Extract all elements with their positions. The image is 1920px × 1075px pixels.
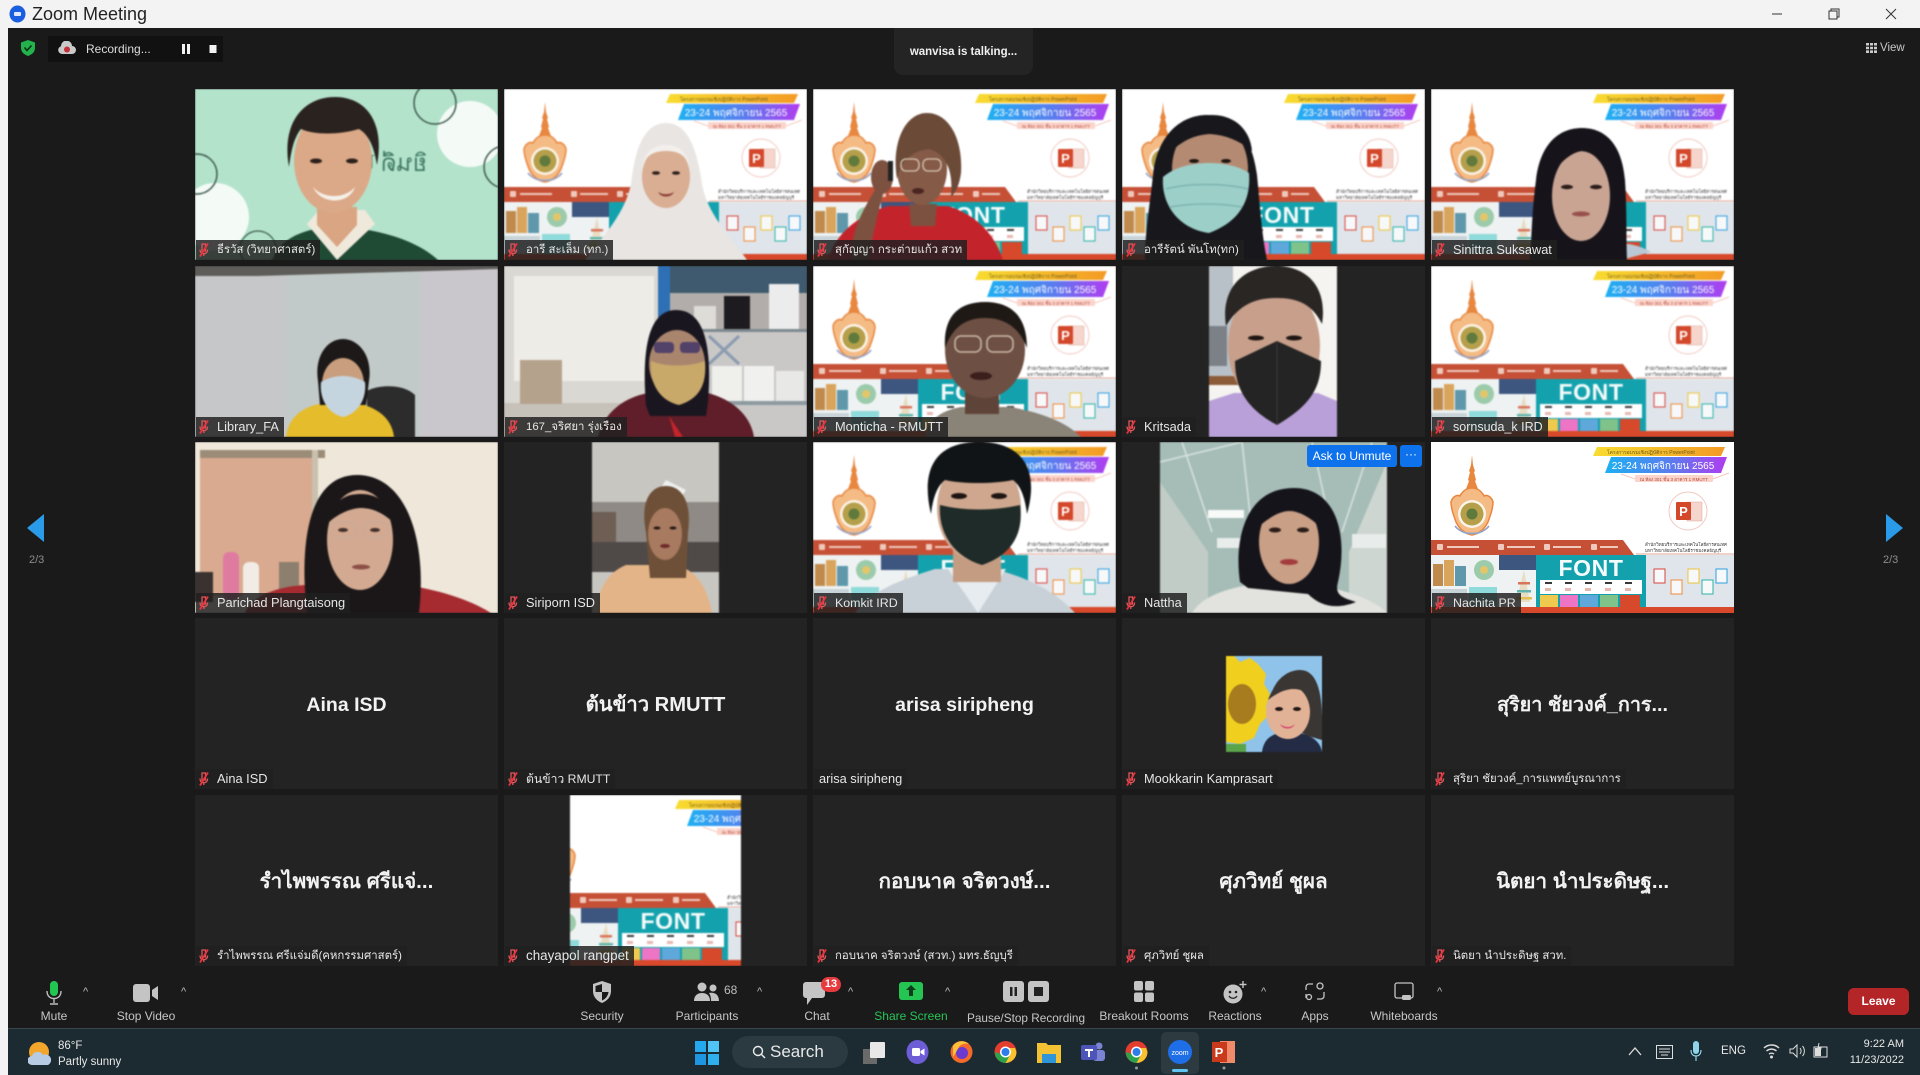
toolbar button: participants: Participants xyxy=(676,1009,738,1023)
tile: Nattha with ask to unmute xyxy=(1122,442,1425,613)
tile: Kritsada: Kritsada xyxy=(1144,419,1191,434)
toolbar button: chat: Chat xyxy=(804,1009,830,1023)
tile: Parichad Plangtaisong: Parichad Plangtaisong xyxy=(217,595,345,610)
tile: woman in red shirt on phone: สุกัญญา กระต่ายแก้ว สวท xyxy=(835,244,962,256)
icon: powerpoint xyxy=(1212,1041,1235,1070)
tile: Siriporn ISD: Siriporn ISD xyxy=(526,595,595,610)
icon: zoom logo xyxy=(10,6,26,22)
more options button xyxy=(1400,445,1422,467)
search box xyxy=(732,1036,848,1068)
tile: woman in tan mask with shelves xyxy=(504,266,807,437)
tile: Nattha with ask to unmute: Nattha xyxy=(1144,595,1182,610)
active speaker tooltip xyxy=(894,28,1033,75)
tile: arisa siripheng: arisa siripheng xyxy=(895,694,1034,716)
clock: 11/23/2022 xyxy=(1850,1054,1904,1066)
toolbar button: mute: Mute xyxy=(41,1009,67,1023)
tile: กอบนาค จริตวงษ์: กอบนาค จริตวงษ์... xyxy=(879,870,1050,893)
clock: 9:22 AM xyxy=(1864,1038,1904,1050)
tile: รำไพพรรณ ศรีแจ่มดี: รำไพพรรณ ศรีแจ่มดี(คหกรรมศาสตร์) xyxy=(217,950,402,962)
tile: arisa siripheng xyxy=(813,618,1116,789)
previous page arrow: 2/3 xyxy=(29,554,44,566)
tile: Mookkarin Kamprasart xyxy=(1122,618,1425,789)
toolbar button: security: Security xyxy=(580,1009,624,1023)
chat badge 13: 13 xyxy=(825,978,837,990)
tile: teacher with green background: ยินดี UTT xyxy=(328,150,427,177)
icon: zoom active xyxy=(1161,1032,1199,1074)
toolbar button: share screen xyxy=(874,982,950,1023)
toolbar button: stop video: Stop Video xyxy=(117,1009,175,1023)
more options button: ··· xyxy=(1405,447,1417,461)
icon: encryption shield xyxy=(21,40,35,56)
icon: powerpoint: P xyxy=(1215,1045,1224,1060)
chat badge 13 xyxy=(821,977,841,992)
tile: Sinittra Suksawat xyxy=(1431,89,1734,260)
toolbar button: chat xyxy=(803,977,853,1023)
leave button xyxy=(1848,988,1909,1015)
toolbar button: stop video xyxy=(117,984,186,1023)
view button xyxy=(1866,42,1905,54)
tile: woman in teal mask: อารีรัตน์ พันโท(ทก) xyxy=(1144,244,1239,256)
tile: กอบนาค จริตวงษ์: กอบนาค จริตวงษ์ (สวท.) มทร.ธัญบุรี xyxy=(835,950,1013,962)
left window edge xyxy=(0,28,8,1075)
system tray icons xyxy=(1628,1041,1828,1061)
weather widget xyxy=(28,1040,122,1068)
icon: chrome running xyxy=(1126,1041,1148,1070)
tile: สุริยา ชัยวงค์: สุริยา ชัยวงค์_การ... xyxy=(1497,694,1668,716)
text: ^ xyxy=(848,986,853,998)
text: ^ xyxy=(83,986,88,998)
clock xyxy=(1850,1038,1904,1066)
tile: Aina ISD: Aina ISD xyxy=(306,694,387,716)
icon: chrome xyxy=(994,1041,1016,1063)
tile: ศุภวิทย์ ชูผล: ศุภวิทย์ ชูผล xyxy=(1144,950,1204,962)
icon: file explorer xyxy=(1037,1043,1061,1063)
participant grid xyxy=(195,89,1734,966)
tile: Monticha - RMUTT xyxy=(813,266,1116,437)
avatar: woman with sunflower xyxy=(1225,655,1323,753)
text: ^ xyxy=(1261,986,1266,998)
tile: รำไพพรรณ ศรีแจ่มดี: รำไพพรรณ ศรีแจ่... xyxy=(260,870,433,893)
toolbar button: participants: 68 xyxy=(724,983,737,997)
active speaker tooltip: wanvisa is talking... xyxy=(910,46,1017,58)
tile: woman in red shirt on phone xyxy=(813,89,1116,260)
toolbar button: apps: Apps xyxy=(1301,1009,1329,1023)
tile: นิตยา นำประดิษฐ: นิตยา นำประดิษฐ สวท. xyxy=(1453,950,1566,962)
tile: สุริยา ชัยวงค์ xyxy=(1431,618,1734,789)
tile: sornsuda_k IRD slide only xyxy=(1431,266,1734,437)
icon: meet chat xyxy=(906,1040,928,1064)
toolbar button: whiteboards xyxy=(1370,982,1442,1023)
tile: Nachita PR slide only: Nachita PR xyxy=(1453,596,1516,610)
windows taskbar xyxy=(8,1028,1920,1075)
toolbar button: breakout rooms xyxy=(1099,981,1189,1023)
tile: ต้นข้าว RMUTT xyxy=(504,618,807,789)
tile: Parichad Plangtaisong xyxy=(195,442,498,613)
tile: teacher with green background xyxy=(195,89,498,260)
toolbar button: reactions xyxy=(1208,981,1266,1023)
toolbar button: share screen: Share Screen xyxy=(874,1009,948,1023)
tile: Kritsada xyxy=(1122,266,1425,437)
icon: task view xyxy=(863,1042,885,1064)
tile: arisa siripheng: arisa siripheng xyxy=(819,771,902,786)
leave button: Leave xyxy=(1861,994,1896,1008)
window controls xyxy=(1772,8,1896,20)
tile: Sinittra Suksawat: Sinittra Suksawat xyxy=(1453,242,1552,257)
icon: teams xyxy=(1081,1042,1105,1061)
tile: Nachita PR slide only xyxy=(1431,442,1734,613)
weather text: Partly sunny xyxy=(58,1056,121,1068)
text: ^ xyxy=(1437,986,1442,998)
icon: pause and stop xyxy=(182,44,216,54)
tile: ต้นข้าว RMUTT: ต้นข้าว RMUTT xyxy=(586,694,725,716)
tile: ศุภวิทย์ ชูผล xyxy=(1122,795,1425,966)
tile: woman in white hijab xyxy=(504,89,807,260)
ask to unmute button: Ask to Unmute xyxy=(1313,449,1391,463)
recording label: Recording... xyxy=(86,42,151,56)
toolbar button: security xyxy=(580,981,624,1023)
tile: teacher with green background: ธีรวัส (วิทยาศาสตร์) xyxy=(217,244,315,256)
tile: Komkit IRD: Komkit IRD xyxy=(835,596,898,610)
tile: นิตยา นำประดิษฐ xyxy=(1431,795,1734,966)
tile: Aina ISD: Aina ISD xyxy=(217,771,268,786)
next page arrow: 2/3 xyxy=(1883,554,1898,566)
icon: recording cloud xyxy=(58,41,76,54)
tile: Library_FA: Library_FA xyxy=(217,419,279,434)
ask to unmute button xyxy=(1307,445,1397,467)
tile: sornsuda_k IRD slide only: sornsuda_k IRD xyxy=(1453,420,1543,434)
tile: woman in white hijab: อารี สะเล็ม (ทก.) xyxy=(526,244,608,256)
tile: Mookkarin Kamprasart: Mookkarin Kamprasart xyxy=(1144,771,1273,786)
tile: Library_FA xyxy=(195,266,498,437)
tile: Siriporn ISD xyxy=(504,442,807,613)
tile: รำไพพรรณ ศรีแจ่มดี xyxy=(195,795,498,966)
weather text: 86°F xyxy=(58,1040,82,1052)
next page arrow xyxy=(1883,514,1903,566)
toolbar button: whiteboards: Whiteboards xyxy=(1370,1009,1438,1023)
text: ^ xyxy=(757,986,762,998)
tile: Aina ISD xyxy=(195,618,498,789)
text: ^ xyxy=(181,986,186,998)
icon: zoom active: zoom xyxy=(1171,1050,1189,1057)
toolbar button: reactions: Reactions xyxy=(1208,1009,1262,1023)
window title: Zoom Meeting xyxy=(32,4,147,24)
toolbar button: breakout rooms: Breakout Rooms xyxy=(1099,1009,1189,1023)
tile: woman in tan mask with shelves: 167_จริศยา รุ่งเรือง xyxy=(526,421,622,433)
tile: นิตยา นำประดิษฐ: นิตยา นำประดิษฐ... xyxy=(1496,870,1669,893)
language indicator: ENG xyxy=(1721,1045,1746,1057)
weather text xyxy=(58,1040,122,1068)
tile: chayapol rangpet with cropped slide: chayapol rangpet xyxy=(526,948,629,963)
view button: View xyxy=(1880,42,1905,54)
tile: สุริยา ชัยวงค์: สุริยา ชัยวงค์_การแพทย์บูรณาการ xyxy=(1453,773,1621,785)
title bar xyxy=(0,0,1920,28)
icon: windows start xyxy=(695,1041,719,1065)
toolbar button: participants xyxy=(676,982,762,1023)
tile: Monticha - RMUTT: Monticha - RMUTT xyxy=(835,419,943,434)
toolbar button: mute xyxy=(41,981,88,1023)
tile: กอบนาค จริตวงษ์ xyxy=(813,795,1116,966)
previous page arrow xyxy=(27,514,44,566)
tile: chayapol rangpet with cropped slide xyxy=(504,795,807,966)
text: ^ xyxy=(945,986,950,998)
toolbar button: pause or stop recording: Pause/Stop Recording xyxy=(967,1011,1085,1025)
icon: sun behind cloud xyxy=(28,1042,52,1065)
toolbar button: pause or stop recording xyxy=(967,981,1085,1025)
tile: ต้นข้าว RMUTT: ต้นข้าว RMUTT xyxy=(526,772,610,786)
search box: Search xyxy=(770,1042,824,1061)
tile: Komkit IRD xyxy=(813,442,1116,613)
icon: firefox xyxy=(950,1041,972,1063)
recording indicator xyxy=(48,36,223,62)
tile: woman in teal mask xyxy=(1122,89,1425,260)
toolbar button: apps xyxy=(1301,982,1329,1023)
tile: ศุภวิทย์ ชูผล: ศุภวิทย์ ชูผล xyxy=(1219,870,1328,893)
